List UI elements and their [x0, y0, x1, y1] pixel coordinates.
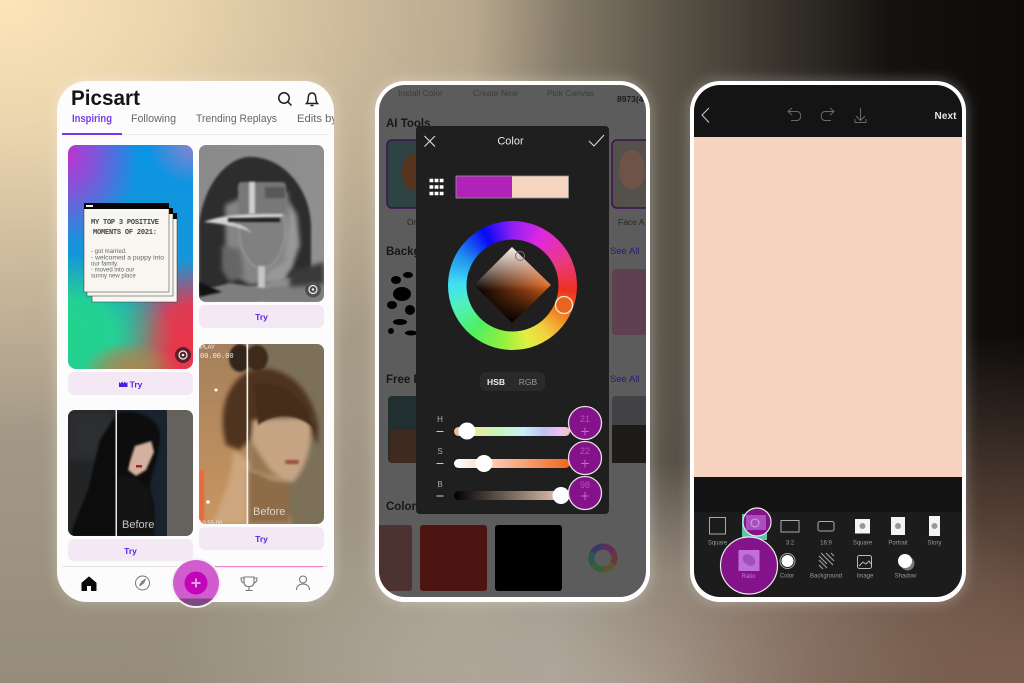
colour wheel	[448, 221, 577, 350]
sliders: H	[437, 415, 443, 424]
dimmed app screen: See All	[610, 246, 640, 257]
brightness diamond	[474, 247, 551, 323]
card: bun hair portrait	[199, 344, 324, 527]
button: Try	[199, 305, 324, 328]
icon: bell	[306, 93, 318, 106]
icon: back	[702, 108, 709, 122]
HSB RGB toggle: RGB	[519, 377, 538, 387]
icon: compass	[136, 576, 150, 590]
tabs: Trending Replays	[196, 113, 277, 125]
value bubbles: 22	[580, 446, 590, 456]
button: Try: Try	[255, 312, 268, 322]
HSB RGB toggle: HSB	[487, 377, 505, 387]
ratio options	[708, 514, 942, 546]
button: Try: Try	[255, 534, 268, 544]
dimmed app screen: Background	[386, 246, 453, 258]
icon: user	[296, 576, 310, 590]
button: Try	[199, 527, 324, 550]
note stack: MY TOP 3 POSITIVE	[91, 219, 159, 227]
highlight: 3:4 option	[743, 508, 771, 536]
dimmed app screen: Free Photos	[386, 374, 452, 386]
value bubbles: 21	[580, 414, 590, 424]
icon: colour ring	[591, 546, 615, 570]
value bubbles	[568, 406, 602, 510]
tabs: Edits by	[297, 113, 337, 125]
HSB RGB toggle	[480, 372, 545, 391]
ratio options: Square	[853, 540, 873, 546]
colour dialog	[416, 126, 609, 514]
note stack: MOMENTS OF 2021:	[93, 229, 157, 237]
tool row: Shadow	[895, 574, 917, 580]
dimmed app screen: Pick Canvas	[547, 88, 594, 98]
highlight: ratio tool	[720, 537, 778, 594]
dimmed app screen: AI Tools	[386, 118, 431, 130]
card: bun hair portrait: PLAY	[200, 345, 215, 351]
card: bun hair portrait: 00.00.00	[200, 353, 234, 361]
card: dark hair before and after: Before	[122, 519, 154, 531]
dimmed app screen: Face A	[618, 217, 645, 227]
tabs: Inspiring	[72, 113, 112, 125]
note stack: our family.	[91, 262, 119, 268]
wheel centre	[466, 240, 558, 332]
dimmed app screen: Or	[407, 217, 417, 227]
card: bun hair portrait: 10.55.00	[199, 521, 223, 527]
button: crown Try	[68, 372, 193, 395]
sliders	[436, 415, 570, 504]
button: Try	[68, 539, 193, 561]
button: crown Try: Try	[130, 380, 143, 390]
icon: redo	[821, 108, 834, 120]
phone 2: colour picker	[372, 79, 652, 604]
button: Try: Try	[124, 546, 137, 556]
note stack	[84, 203, 177, 302]
dialog title: Color	[497, 136, 524, 148]
bottom navigation	[62, 566, 328, 590]
colour swatch	[456, 176, 568, 198]
dimmed app screen: Create New	[473, 88, 519, 98]
dimmed app screen	[372, 85, 652, 597]
sliders: S	[437, 447, 443, 456]
note stack: - welcomed a puppy into	[91, 256, 165, 262]
card: bun hair portrait: Before	[253, 506, 285, 518]
Picsart logo: Picsart	[71, 87, 140, 110]
ratio options: 3:4	[750, 540, 759, 546]
tool row: Image	[857, 574, 874, 580]
icon: download	[855, 108, 866, 122]
dimmed app screen: 8973(4	[617, 94, 644, 104]
dimmed app screen: Colors	[386, 501, 422, 513]
icon: search	[279, 93, 292, 106]
ratio options: Portrait	[888, 540, 908, 546]
ratio options: Story	[927, 540, 942, 546]
next label: Next	[934, 111, 957, 122]
icon: home	[82, 577, 96, 590]
tabs: Following	[131, 113, 176, 125]
editor screen	[694, 85, 962, 597]
ratio options: Square	[708, 540, 728, 546]
value bubbles: 98	[580, 480, 590, 490]
icon: trophy	[241, 577, 257, 590]
tool row: Background	[810, 574, 842, 580]
icon: undo	[788, 108, 801, 120]
phone 3: canvas editor	[688, 79, 968, 604]
phone 1: Picsart feed	[55, 79, 337, 608]
icon: close	[424, 136, 435, 146]
tabs	[62, 113, 337, 135]
note stack: sunny new place	[91, 274, 136, 280]
icon: replay badge	[175, 347, 191, 363]
highlight: add button	[171, 558, 221, 608]
card: gradient post with note	[68, 145, 193, 369]
card: glass portrait	[199, 145, 324, 302]
tool row: Color	[780, 574, 794, 580]
dimmed app screen: Install Color	[398, 88, 443, 98]
highlight: ratio tool: Ratio	[741, 574, 756, 580]
dimmed app screen: See All	[610, 374, 640, 385]
card: dark hair before and after	[68, 410, 193, 536]
ratio options: 16:9	[820, 540, 832, 546]
icon: swatch grid	[430, 180, 444, 194]
icon: confirm	[589, 135, 604, 146]
note stack: - got married.	[91, 249, 127, 255]
ratio options: 3:2	[786, 540, 795, 546]
icon: replay badge	[305, 282, 321, 298]
sliders: B	[437, 480, 443, 489]
note stack: - moved into our	[91, 268, 134, 274]
tool row	[780, 553, 917, 580]
wheel handle	[556, 296, 572, 314]
